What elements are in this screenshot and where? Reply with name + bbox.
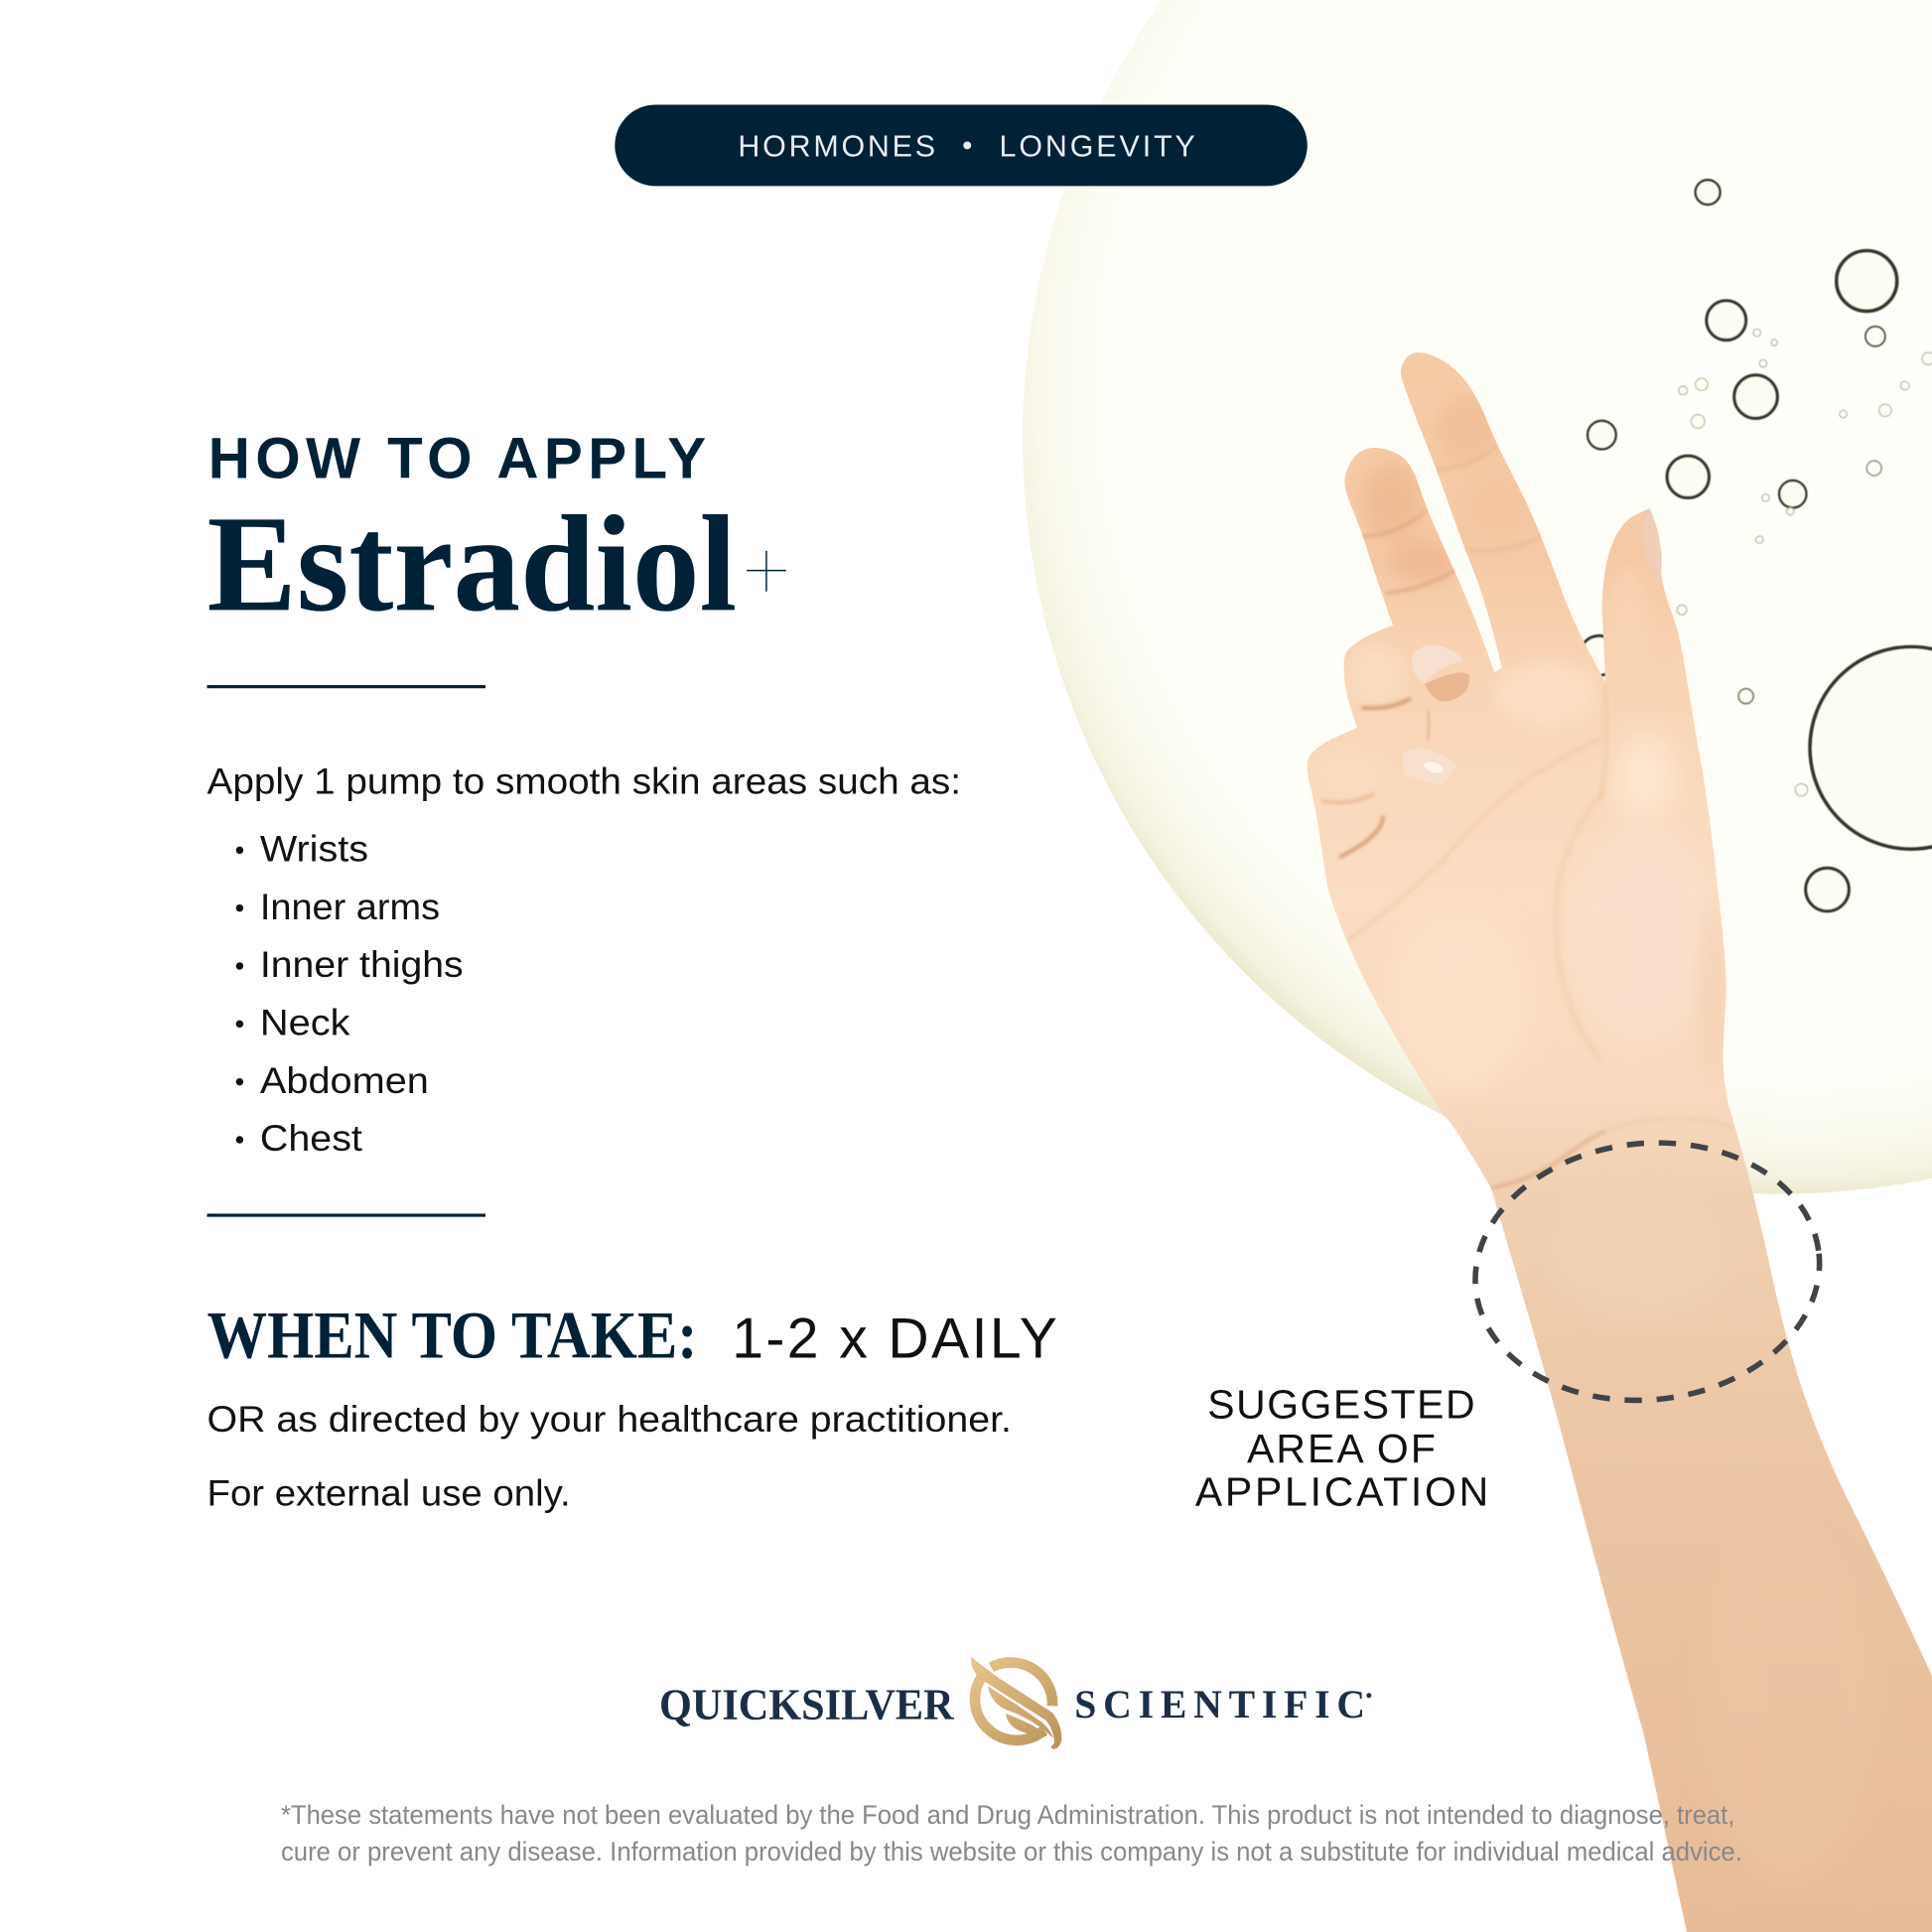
when to take: 1-2 x DAILY [732,1308,1057,1371]
when to take: WHEN TO TAKE: [207,1298,697,1373]
palm tones [1390,733,1876,1886]
palm lines [1347,685,1732,1188]
application sites list: Inner thighs [260,943,464,985]
finger creases [1323,447,1542,857]
logo emblem [971,1656,1061,1749]
application sites list: Abdomen [260,1059,429,1101]
title [207,427,786,640]
category pill: LONGEVITY [1000,130,1195,164]
when to take: OR as directed by your healthcare practitioner. [207,1398,1012,1440]
when to take: For external use only. [207,1472,571,1514]
rule below list [207,1213,485,1217]
disclaimer: cure or prevent any disease. Information provided by this website or this company is not a substitute for individual medical advice. [281,1837,1742,1866]
category pill [615,104,1308,186]
application instructions: Apply 1 pump to smooth skin areas such as: [207,759,961,801]
hand and forearm [1308,352,1932,1932]
title: Estradiol [207,487,737,640]
application instructions [207,759,961,1159]
brand logo: SCIENTIFIC [1074,1683,1365,1726]
application sites list: Chest [260,1117,363,1159]
suggested area label: APPLICATION [1195,1469,1488,1515]
liquid droplet [1023,0,1932,1194]
brand logo [659,1656,1371,1749]
suggested area label: AREA OF [1247,1426,1436,1471]
when to take [207,1298,1057,1514]
fingertip tones [1316,397,1650,796]
suggested area label [1195,1381,1488,1515]
bubbles [1580,180,1932,911]
category pill: HORMONES [738,130,935,164]
brand logo: QUICKSILVER [659,1679,954,1728]
rule above list [207,685,485,688]
suggested area label: SUGGESTED [1207,1381,1475,1427]
fingernails [1402,509,1662,784]
application sites list: Wrists [260,828,368,870]
dashed circle: suggested application area [1462,1126,1833,1417]
disclaimer [281,1800,1742,1866]
application sites list [236,828,464,1159]
application sites list: Inner arms [260,886,440,927]
application sites list: Neck [260,1001,350,1042]
disclaimer: *These statements have not been evaluated by the Food and Drug Administration. This product is not intended to diagnose, treat, [281,1800,1734,1830]
title: HOW TO APPLY [208,427,706,491]
